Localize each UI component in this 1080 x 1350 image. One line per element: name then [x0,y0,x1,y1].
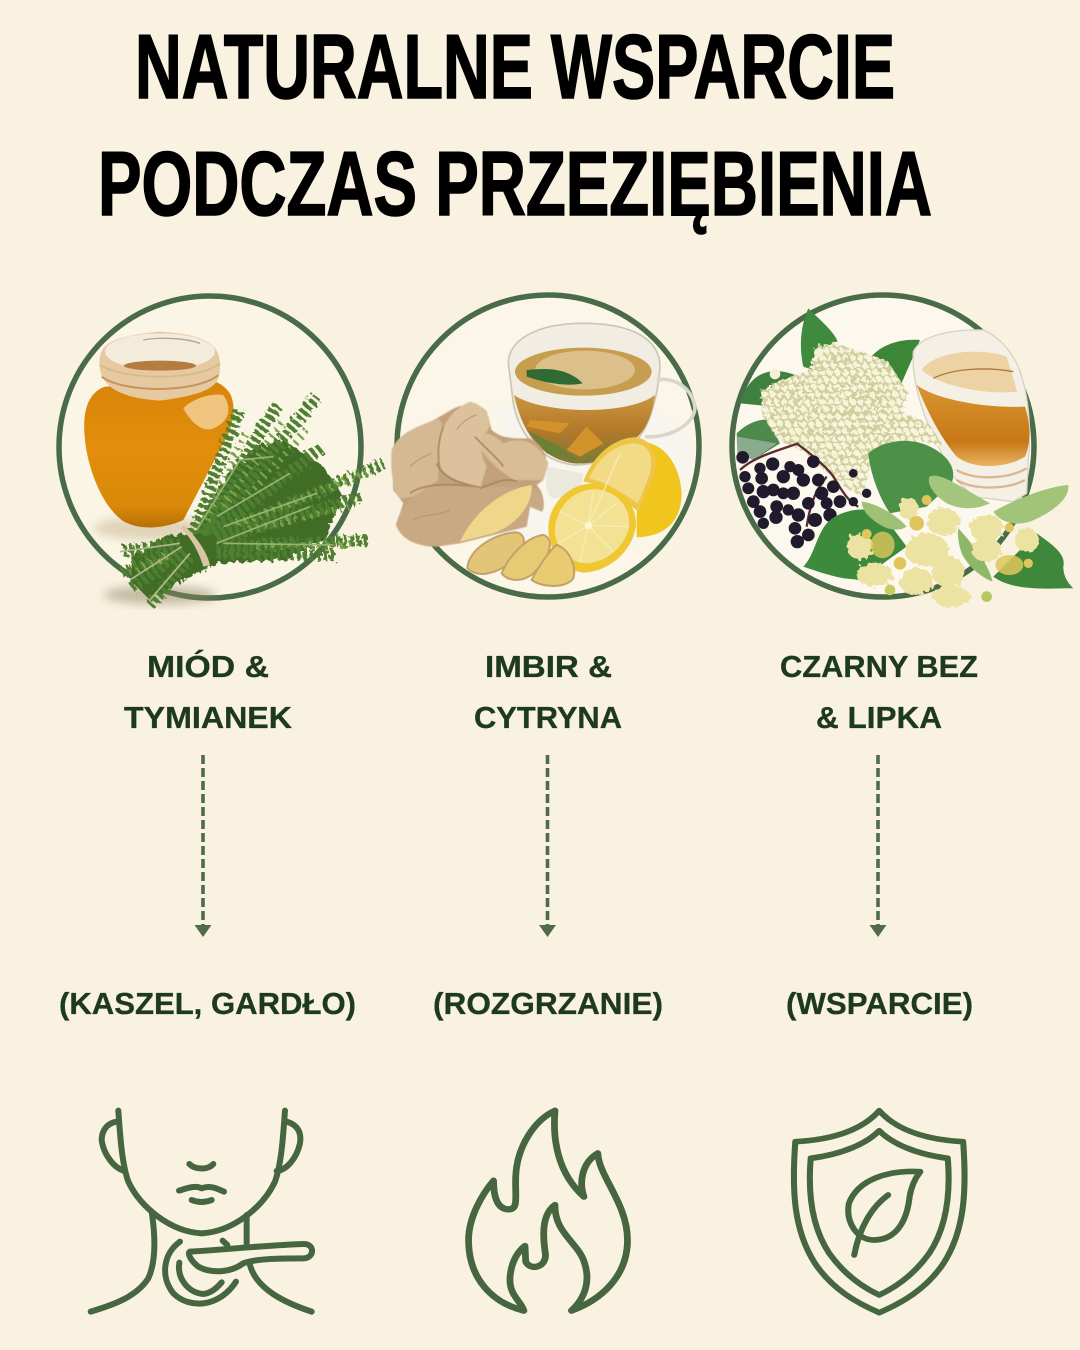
label: lipka: & LIPKA [816,700,942,735]
label: imbir: IMBIR & [485,649,612,684]
icon: shield with leaf [794,1111,965,1313]
effect label 1: (KASZEL, GARDŁO) [59,986,356,1021]
arrow 2 [539,755,556,937]
label: cytryna: CYTRYNA [474,700,622,735]
icon: throat [91,1111,312,1312]
label column 3 [780,649,978,735]
icon: flame [469,1111,627,1311]
circle ring 1 [59,296,361,598]
label column 2 [474,649,622,735]
circle ring 2 [397,295,699,597]
illustration: honey jar and thyme [84,332,383,605]
effect label 3: (WSPARCIE) [786,986,973,1021]
illustration: elderflower, berries, tea and linden [736,308,1073,607]
label: tymianek: TYMIANEK [124,700,293,735]
title [98,17,932,235]
arrow 1 [194,755,212,937]
label: czarny bez: CZARNY BEZ [780,649,978,684]
label column 1 [124,648,293,735]
arrow 3 [870,755,886,937]
label: miód: MIÓD & [147,648,269,684]
panel: elderberry and linden [732,295,1073,607]
panel: ginger and lemon [391,295,699,597]
illustration: ginger, tea and lemon [391,323,695,586]
panel: honey and thyme [59,296,383,605]
effect label 2: (ROZGRZANIE) [433,986,663,1021]
circle ring 3 [732,295,1034,597]
